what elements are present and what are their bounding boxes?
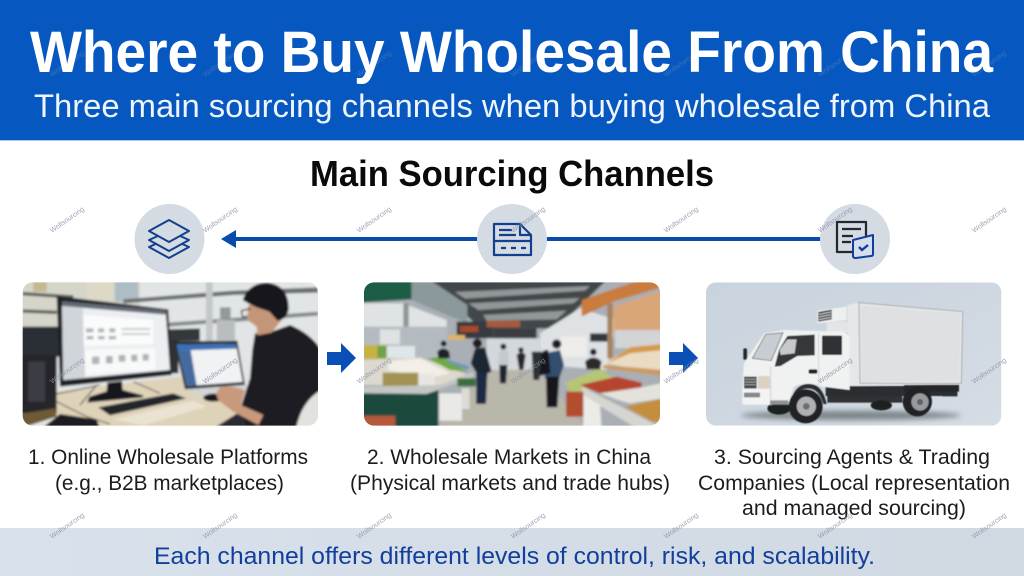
subtitle: Three main sourcing channels when buying wholesale from China: [34, 88, 990, 124]
watermarks: Wollsourcing: [202, 357, 239, 386]
footer band: [0, 528, 1024, 576]
header watermarks: Wollsourcing: [817, 50, 854, 79]
section heading: Main Sourcing Channels: [310, 153, 714, 194]
watermarks: [49, 206, 1008, 541]
watermarks: Wollsourcing: [202, 206, 239, 235]
right stalls: [540, 308, 617, 370]
header watermarks: Wollsourcing: [510, 50, 547, 79]
watermarks: Wollsourcing: [817, 512, 854, 541]
photo: refrigerated truck: [706, 282, 1001, 426]
far hall: [457, 322, 493, 338]
floor: [437, 370, 587, 428]
label: sourcing agents: [698, 445, 1010, 520]
watermarks: Wollsourcing: [356, 206, 393, 235]
label: online wholesale platforms: (e.g., B2B marketplaces): [55, 471, 284, 495]
watermarks: Wollsourcing: [510, 357, 547, 386]
label: wholesale markets: 2. Wholesale Markets in China: [367, 445, 651, 469]
header watermarks: Wollsourcing: [971, 50, 1008, 79]
person: [241, 325, 320, 428]
watermarks: Wollsourcing: [510, 512, 547, 541]
wheels: [789, 389, 823, 423]
label: online wholesale platforms: 1. Online Wholesale Platforms: [28, 445, 308, 469]
label: sourcing agents: Companies (Local representation: [698, 471, 1010, 495]
ceiling: [430, 280, 607, 328]
header watermarks: Wollsourcing: [356, 50, 393, 79]
watermarks: Wollsourcing: [510, 206, 547, 235]
watermarks: Wollsourcing: [663, 512, 700, 541]
label: wholesale markets: (Physical markets and trade hubs): [350, 471, 670, 495]
watermarks: Wollsourcing: [356, 512, 393, 541]
footer note: Each channel offers different levels of control, risk, and scalability.: [154, 543, 875, 570]
arrow: step 2 to 3: [669, 343, 698, 373]
icon: document: [477, 204, 547, 274]
shoppers: [437, 339, 602, 407]
connector arrow: [221, 230, 824, 248]
laptop: [174, 341, 245, 389]
keyboards: [98, 393, 186, 415]
label: online wholesale platforms: [28, 445, 308, 495]
watermarks: Wollsourcing: [971, 512, 1008, 541]
watermarks: Wollsourcing: [49, 357, 86, 386]
watermarks: Wollsourcing: [817, 206, 854, 235]
watermarks: Wollsourcing: [663, 357, 700, 386]
header watermarks: Wollsourcing: [663, 50, 700, 79]
header banner: [0, 0, 1024, 141]
watermarks: Wollsourcing: [356, 357, 393, 386]
desk: [57, 377, 240, 428]
monitor: [57, 296, 172, 387]
watermarks: Wollsourcing: [49, 206, 86, 235]
watermarks: Wollsourcing: [817, 357, 854, 386]
watermarks: Wollsourcing: [663, 206, 700, 235]
watermarks: Wollsourcing: [971, 357, 1008, 386]
computer tower: [20, 355, 57, 413]
left stall: [360, 345, 387, 359]
header watermarks: Wollsourcing: [202, 50, 239, 79]
icon: layers: [134, 204, 204, 274]
arrow: step 1 to 2: [327, 343, 356, 373]
cooling unit: [817, 307, 847, 323]
watermarks: Wollsourcing: [49, 512, 86, 541]
chassis: [826, 386, 957, 396]
cargo box: [847, 303, 963, 386]
watermarks: Wollsourcing: [971, 206, 1008, 235]
header watermarks: [49, 50, 1008, 79]
chair: [296, 391, 320, 428]
right fruit stand: [604, 349, 660, 371]
photo: person working at computer: [20, 280, 320, 428]
wheels far side: [767, 402, 791, 415]
header watermarks: Wollsourcing: [49, 50, 86, 79]
label: sourcing agents: and managed sourcing): [742, 496, 966, 520]
label: wholesale markets: [350, 445, 670, 495]
watermarks: Wollsourcing: [202, 512, 239, 541]
cab: [742, 330, 850, 405]
label: sourcing agents: 3. Sourcing Agents & Trading: [714, 445, 990, 469]
icon: checklist: [820, 204, 890, 274]
title: Where to Buy Wholesale From China: [30, 20, 994, 85]
photo: wholesale market: [360, 280, 663, 428]
